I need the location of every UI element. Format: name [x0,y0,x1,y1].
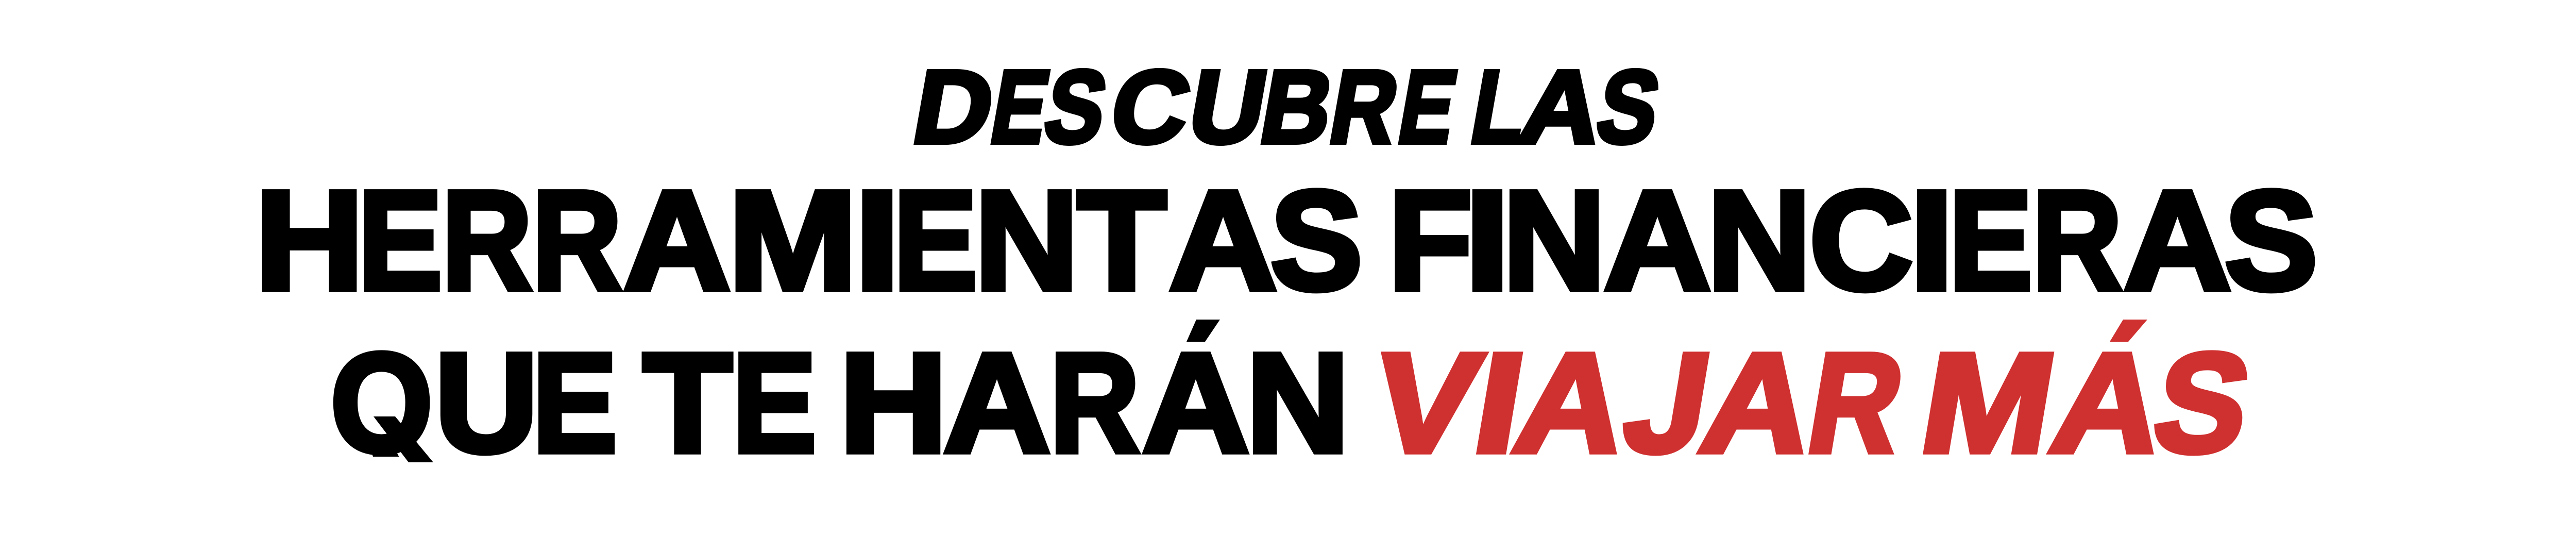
title line 1: Descubre las: E [984,49,1057,164]
title line 2: Herramientas financieras: A [1169,162,1277,320]
title line 2: Herramientas financieras: A [1604,162,1711,320]
title line 1: Descubre las: S [1037,49,1115,164]
title line 2: Herramientas financieras: I [855,162,900,320]
title line 2: Herramientas financieras: M [728,162,857,320]
title line 2: Herramientas financieras: N [975,162,1078,320]
title line 2: Herramientas financieras: E [893,162,977,320]
title line 2: Herramientas financieras: A [2124,162,2231,320]
title line 3 highlight: Viajar más: I [1464,324,1535,482]
title line 2: Herramientas financieras: N [1707,162,1811,320]
title line 2: Herramientas financieras: S [1270,162,1363,320]
title line 3: Que te harán: T [643,324,732,482]
title line 2: Herramientas financieras: N [1503,162,1605,320]
title line 3: Que te harán: U [435,324,538,482]
title line 2: Herramientas financieras: I [1910,162,1954,320]
title line 2: Herramientas financieras: A [623,162,731,320]
title line 1: Descubre las: A [1512,49,1612,164]
title line 3: Que te harán: E [533,324,617,482]
title line 3 highlight: Viajar más: J [1614,324,1721,482]
title line 3: Que te harán: Á [1142,324,1249,482]
title line 2: Herramientas financieras: H [255,162,364,320]
title line 2: Herramientas financieras: T [1077,162,1166,320]
title line 2: Herramientas financieras: E [1949,162,2032,320]
title line 1: Descubre las: L [1464,49,1536,164]
title line 1: Descubre las: R [1322,49,1406,164]
title line 2: Herramientas financieras: R [532,162,622,320]
title line 3: Que te harán: N [1246,324,1349,482]
title line 2: Herramientas financieras: E [358,162,442,320]
title line 1: Descubre las: U [1181,49,1275,164]
title line 1: Descubre las: C [1103,49,1199,164]
title line 3: Que te harán: Q [331,324,433,482]
title line 3 highlight: Viajar más: A [1505,324,1638,482]
title line 2: Herramientas financieras: F [1388,162,1472,320]
title line 3: Que te harán: A [943,324,1050,482]
title line 3: Que te harán: E [733,324,817,482]
title line 1: Descubre las: S [1589,49,1668,164]
title line 2: Herramientas financieras: I [1465,162,1510,320]
title line 3 highlight: Viajar más: R [1798,324,1914,482]
title line 2: Herramientas financieras: R [2032,162,2122,320]
title line 3 highlight: Viajar más [1362,309,2261,482]
title line 1: Descubre las: B [1252,49,1342,164]
title line 3 highlight: Viajar más: S [2144,324,2261,482]
title line 3 highlight: Viajar más: M [1911,324,2066,482]
title line 3 highlight: Viajar más: A [1691,324,1825,482]
title line 2: Herramientas financieras: R [442,162,532,320]
title line 1: Descubre las: D [905,49,1003,164]
title line 3: Que te harán [319,309,1349,508]
title line 3: Que te harán: H [839,324,947,482]
title line 2: Herramientas financieras: C [1809,162,1913,320]
title line 3 highlight: Viajar más: Á [2042,324,2175,482]
title line 1: Descubre las: E [1391,49,1465,164]
title line 2: Herramientas financieras: S [2225,162,2317,320]
title line 3: Que te harán: R [1050,324,1140,482]
title line 3 highlight: Viajar más: V [1362,324,1492,482]
